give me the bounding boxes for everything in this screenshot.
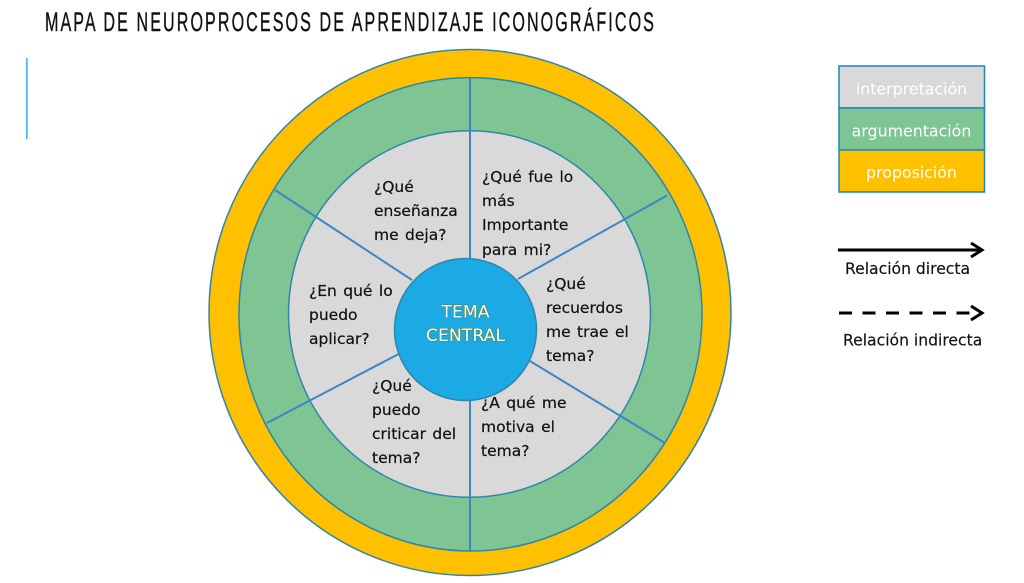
center circle: tema central: TEMA	[440, 302, 490, 322]
center circle: tema central: CENTRAL	[426, 326, 505, 346]
question: top right: Importante	[482, 216, 568, 234]
question: bottom left: tema?	[372, 449, 420, 467]
label: relación directa: Relación directa	[845, 260, 970, 278]
accent line	[26, 58, 28, 139]
center circle: tema central	[394, 258, 536, 400]
legend	[839, 66, 984, 192]
concentric circle diagram	[209, 50, 731, 576]
legend: interpretación: interpretación	[856, 80, 967, 98]
question: top right: más	[482, 192, 515, 210]
label: relación indirecta: Relación indirecta	[843, 332, 982, 350]
ring: proposición	[209, 50, 731, 576]
question: right: ¿Qué	[546, 275, 586, 293]
question: right: recuerdos	[546, 299, 623, 317]
ring: interpretación	[288, 131, 650, 497]
question: top left: me deja?	[374, 226, 446, 244]
question: left: puedo	[309, 306, 358, 324]
question: right: me trae el	[546, 323, 629, 341]
arrow: relación directa	[838, 243, 982, 257]
sector dividers	[267, 78, 667, 551]
question: bottom right: tema?	[481, 442, 529, 460]
question: top right: para mi?	[482, 241, 551, 259]
question: top left: ¿Qué	[374, 178, 414, 196]
legend: argumentación: argumentación	[852, 122, 971, 140]
legend: argumentación	[839, 108, 984, 150]
question: top right: ¿Qué fue lo	[482, 168, 573, 186]
legend: proposición	[839, 150, 984, 192]
arrow: relación indirecta	[839, 306, 982, 320]
question: bottom right: motiva el	[481, 418, 555, 436]
question: right: tema?	[546, 347, 594, 365]
question: top left: enseñanza	[374, 202, 458, 220]
question: bottom left: ¿Qué	[372, 377, 412, 395]
legend: interpretación	[839, 66, 984, 108]
question: bottom right: ¿A qué me	[481, 394, 567, 412]
ring: argumentación	[239, 78, 702, 551]
question: bottom left: criticar del	[372, 425, 456, 443]
question: bottom left: puedo	[372, 401, 421, 419]
question: left: ¿En qué lo	[309, 282, 393, 300]
legend: proposición: proposición	[866, 163, 957, 182]
question: left: aplicar?	[309, 330, 370, 348]
